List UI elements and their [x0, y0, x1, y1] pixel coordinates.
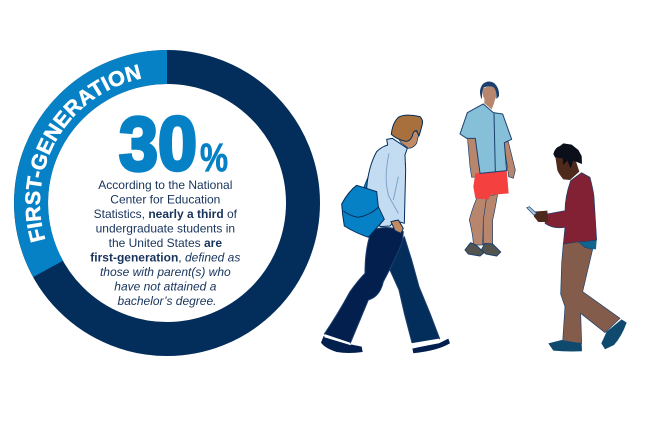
- strap: [364, 163, 406, 202]
- head: [398, 130, 419, 148]
- head: [555, 157, 579, 180]
- hand and phone: [534, 211, 548, 222]
- arms: [467, 137, 481, 177]
- description text: Statistics, nearly a third of: [94, 207, 237, 221]
- front leg: [324, 228, 403, 344]
- head: [483, 87, 496, 109]
- sweater: [545, 173, 597, 244]
- hand: [391, 220, 403, 233]
- ring segment: first-generation share: [14, 50, 167, 277]
- description text: undergraduate students in: [96, 222, 235, 236]
- shoes: [601, 319, 627, 349]
- description text: According to the National: [98, 178, 232, 192]
- description text: have not attained a: [114, 280, 217, 294]
- shirt: [367, 138, 407, 227]
- donut chart: 30 percent first-generation: [14, 50, 320, 356]
- big number: 30: [119, 102, 197, 187]
- shorts: [473, 170, 509, 199]
- description text: bachelor’s degree.: [118, 294, 216, 308]
- big number: %: [200, 136, 228, 180]
- description text: those with parent(s) who: [100, 265, 231, 279]
- figure: walking man with blue messenger bag: [321, 115, 450, 353]
- description text: first-generation, defined as: [90, 250, 240, 264]
- back leg: [390, 237, 440, 344]
- bag: [342, 185, 384, 237]
- shirt: [460, 104, 512, 173]
- underwear band: [578, 239, 597, 249]
- figure: man walking and looking at phone: [527, 143, 627, 352]
- shoes: [321, 336, 363, 353]
- description text: the United States are: [109, 236, 222, 250]
- legs: [469, 198, 487, 245]
- ring: remaining share: [31, 67, 303, 339]
- trousers: [561, 242, 620, 343]
- ring label: FIRST-GENERATION: [25, 64, 142, 242]
- sandals: [465, 243, 484, 256]
- description text: Center for Education: [110, 192, 220, 206]
- figure: standing man in blue shirt and red shorts: [460, 82, 515, 256]
